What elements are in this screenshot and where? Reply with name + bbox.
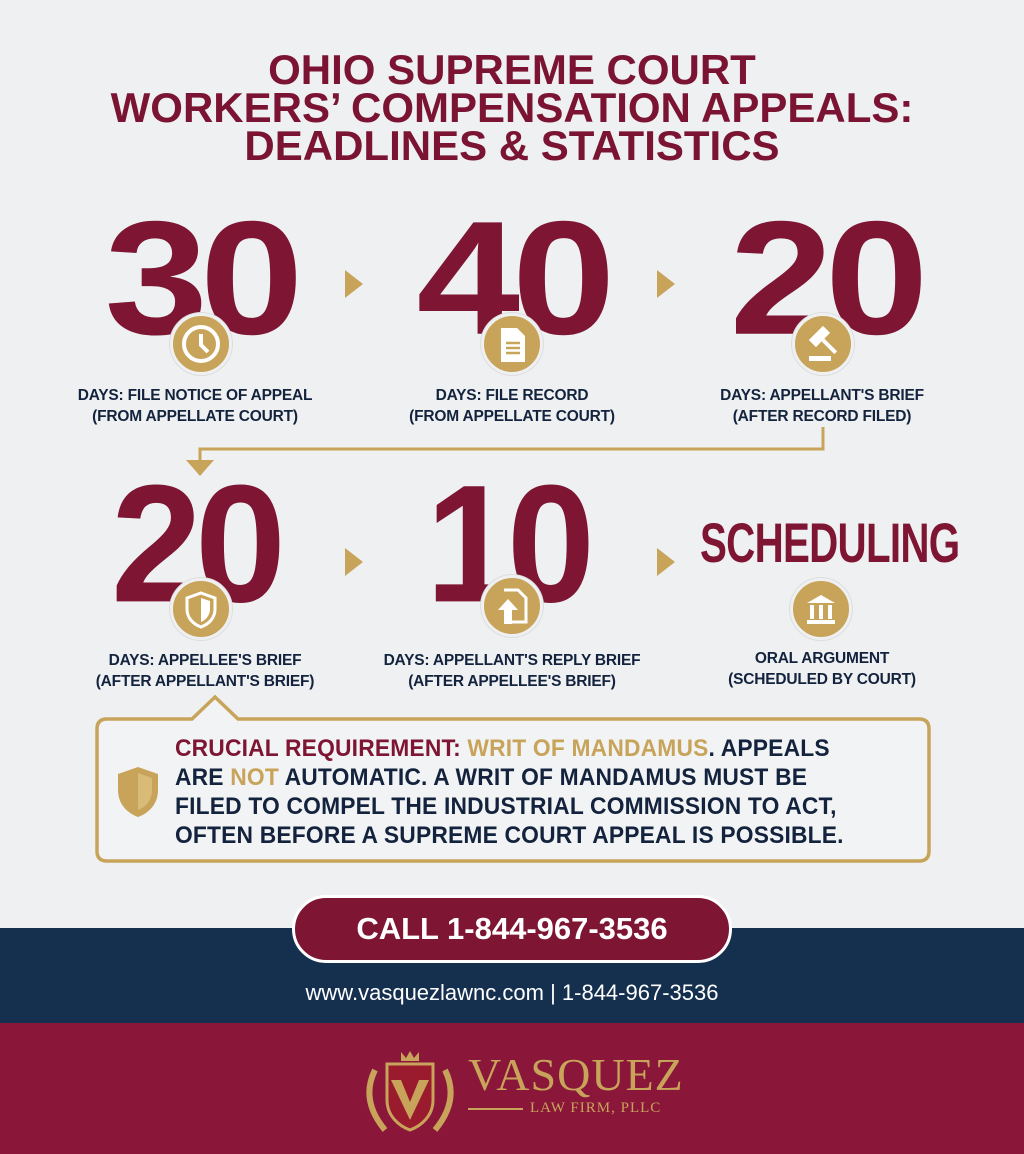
step 6: scheduling: SCHEDULING: [700, 511, 959, 574]
step 4: 20 days: (AFTER APPELLANT'S BRIEF): [96, 673, 314, 690]
step 6: scheduling: (SCHEDULED BY COURT): [728, 671, 916, 688]
icon: shield: [170, 578, 232, 640]
icon: gavel: [792, 313, 854, 375]
callout: writ of mandamus: CRUCIAL REQUIREMENT: WRIT OF MANDAMUS. APPEALS: [175, 735, 830, 762]
step 1: 30 days: [78, 188, 312, 425]
navy band: [0, 928, 1024, 1023]
website text: www.vasquezlawnc.com | 1-844-967-3536: [306, 980, 718, 1005]
arrow: [657, 548, 675, 576]
step 4: 20 days: DAYS: APPELLEE'S BRIEF: [109, 652, 301, 669]
icon: upload document: [481, 575, 543, 637]
step 2: 40 days: (FROM APPELLATE COURT): [409, 408, 615, 425]
step 5: 10 days: [384, 451, 640, 690]
icon: shield: [118, 767, 158, 817]
footer maroon band: [0, 1023, 1024, 1154]
step 5: 10 days: (AFTER APPELLEE'S BRIEF): [408, 673, 616, 690]
step 4: 20 days: 20: [111, 451, 279, 637]
title: WORKERS’ COMPENSATION APPEALS:: [111, 84, 913, 131]
arrow: [345, 270, 363, 298]
arrow: [345, 548, 363, 576]
step 5: 10 days: DAYS: APPELLANT'S REPLY BRIEF: [384, 652, 640, 669]
logo: VASQUEZ: [468, 1049, 684, 1100]
title: OHIO SUPREME COURT: [268, 46, 756, 93]
callout: writ of mandamus: FILED TO COMPEL THE INDUSTRIAL COMMISSION TO ACT,: [175, 793, 837, 820]
step 1: 30 days: 30: [105, 188, 295, 369]
callout: writ of mandamus: ARE NOT AUTOMATIC. A WRIT OF MANDAMUS MUST BE: [175, 764, 807, 791]
icon: clock: [170, 313, 232, 375]
arrow: [657, 270, 675, 298]
step 2: 40 days: 40: [417, 188, 607, 369]
title: DEADLINES & STATISTICS: [244, 122, 780, 169]
step 2: 40 days: DAYS: FILE RECORD: [436, 387, 588, 404]
logo: LAW FIRM, PLLC: [530, 1100, 661, 1116]
callout: writ of mandamus: OFTEN BEFORE A SUPREME COURT APPEAL IS POSSIBLE.: [175, 822, 844, 849]
callout: writ of mandamus: [95, 694, 931, 863]
step 6: scheduling: ORAL ARGUMENT: [755, 650, 889, 667]
step 1: 30 days: DAYS: FILE NOTICE OF APPEAL: [78, 387, 312, 404]
call button: CALL 1-844-967-3536: [356, 911, 668, 946]
step 1: 30 days: (FROM APPELLATE COURT): [92, 408, 298, 425]
step 3: 20 days: DAYS: APPELLANT'S BRIEF: [720, 387, 924, 404]
logo: [366, 1049, 684, 1132]
step 6: scheduling: [700, 511, 959, 688]
step 3: 20 days: (AFTER RECORD FILED): [733, 408, 911, 425]
title: [110, 46, 913, 169]
step 4: 20 days: [96, 451, 314, 690]
icon: courthouse: [790, 578, 852, 640]
step 3: 20 days: 20: [730, 188, 920, 369]
call button: [292, 895, 732, 963]
icon: document: [481, 313, 543, 375]
step 5: 10 days: 10: [426, 451, 588, 637]
